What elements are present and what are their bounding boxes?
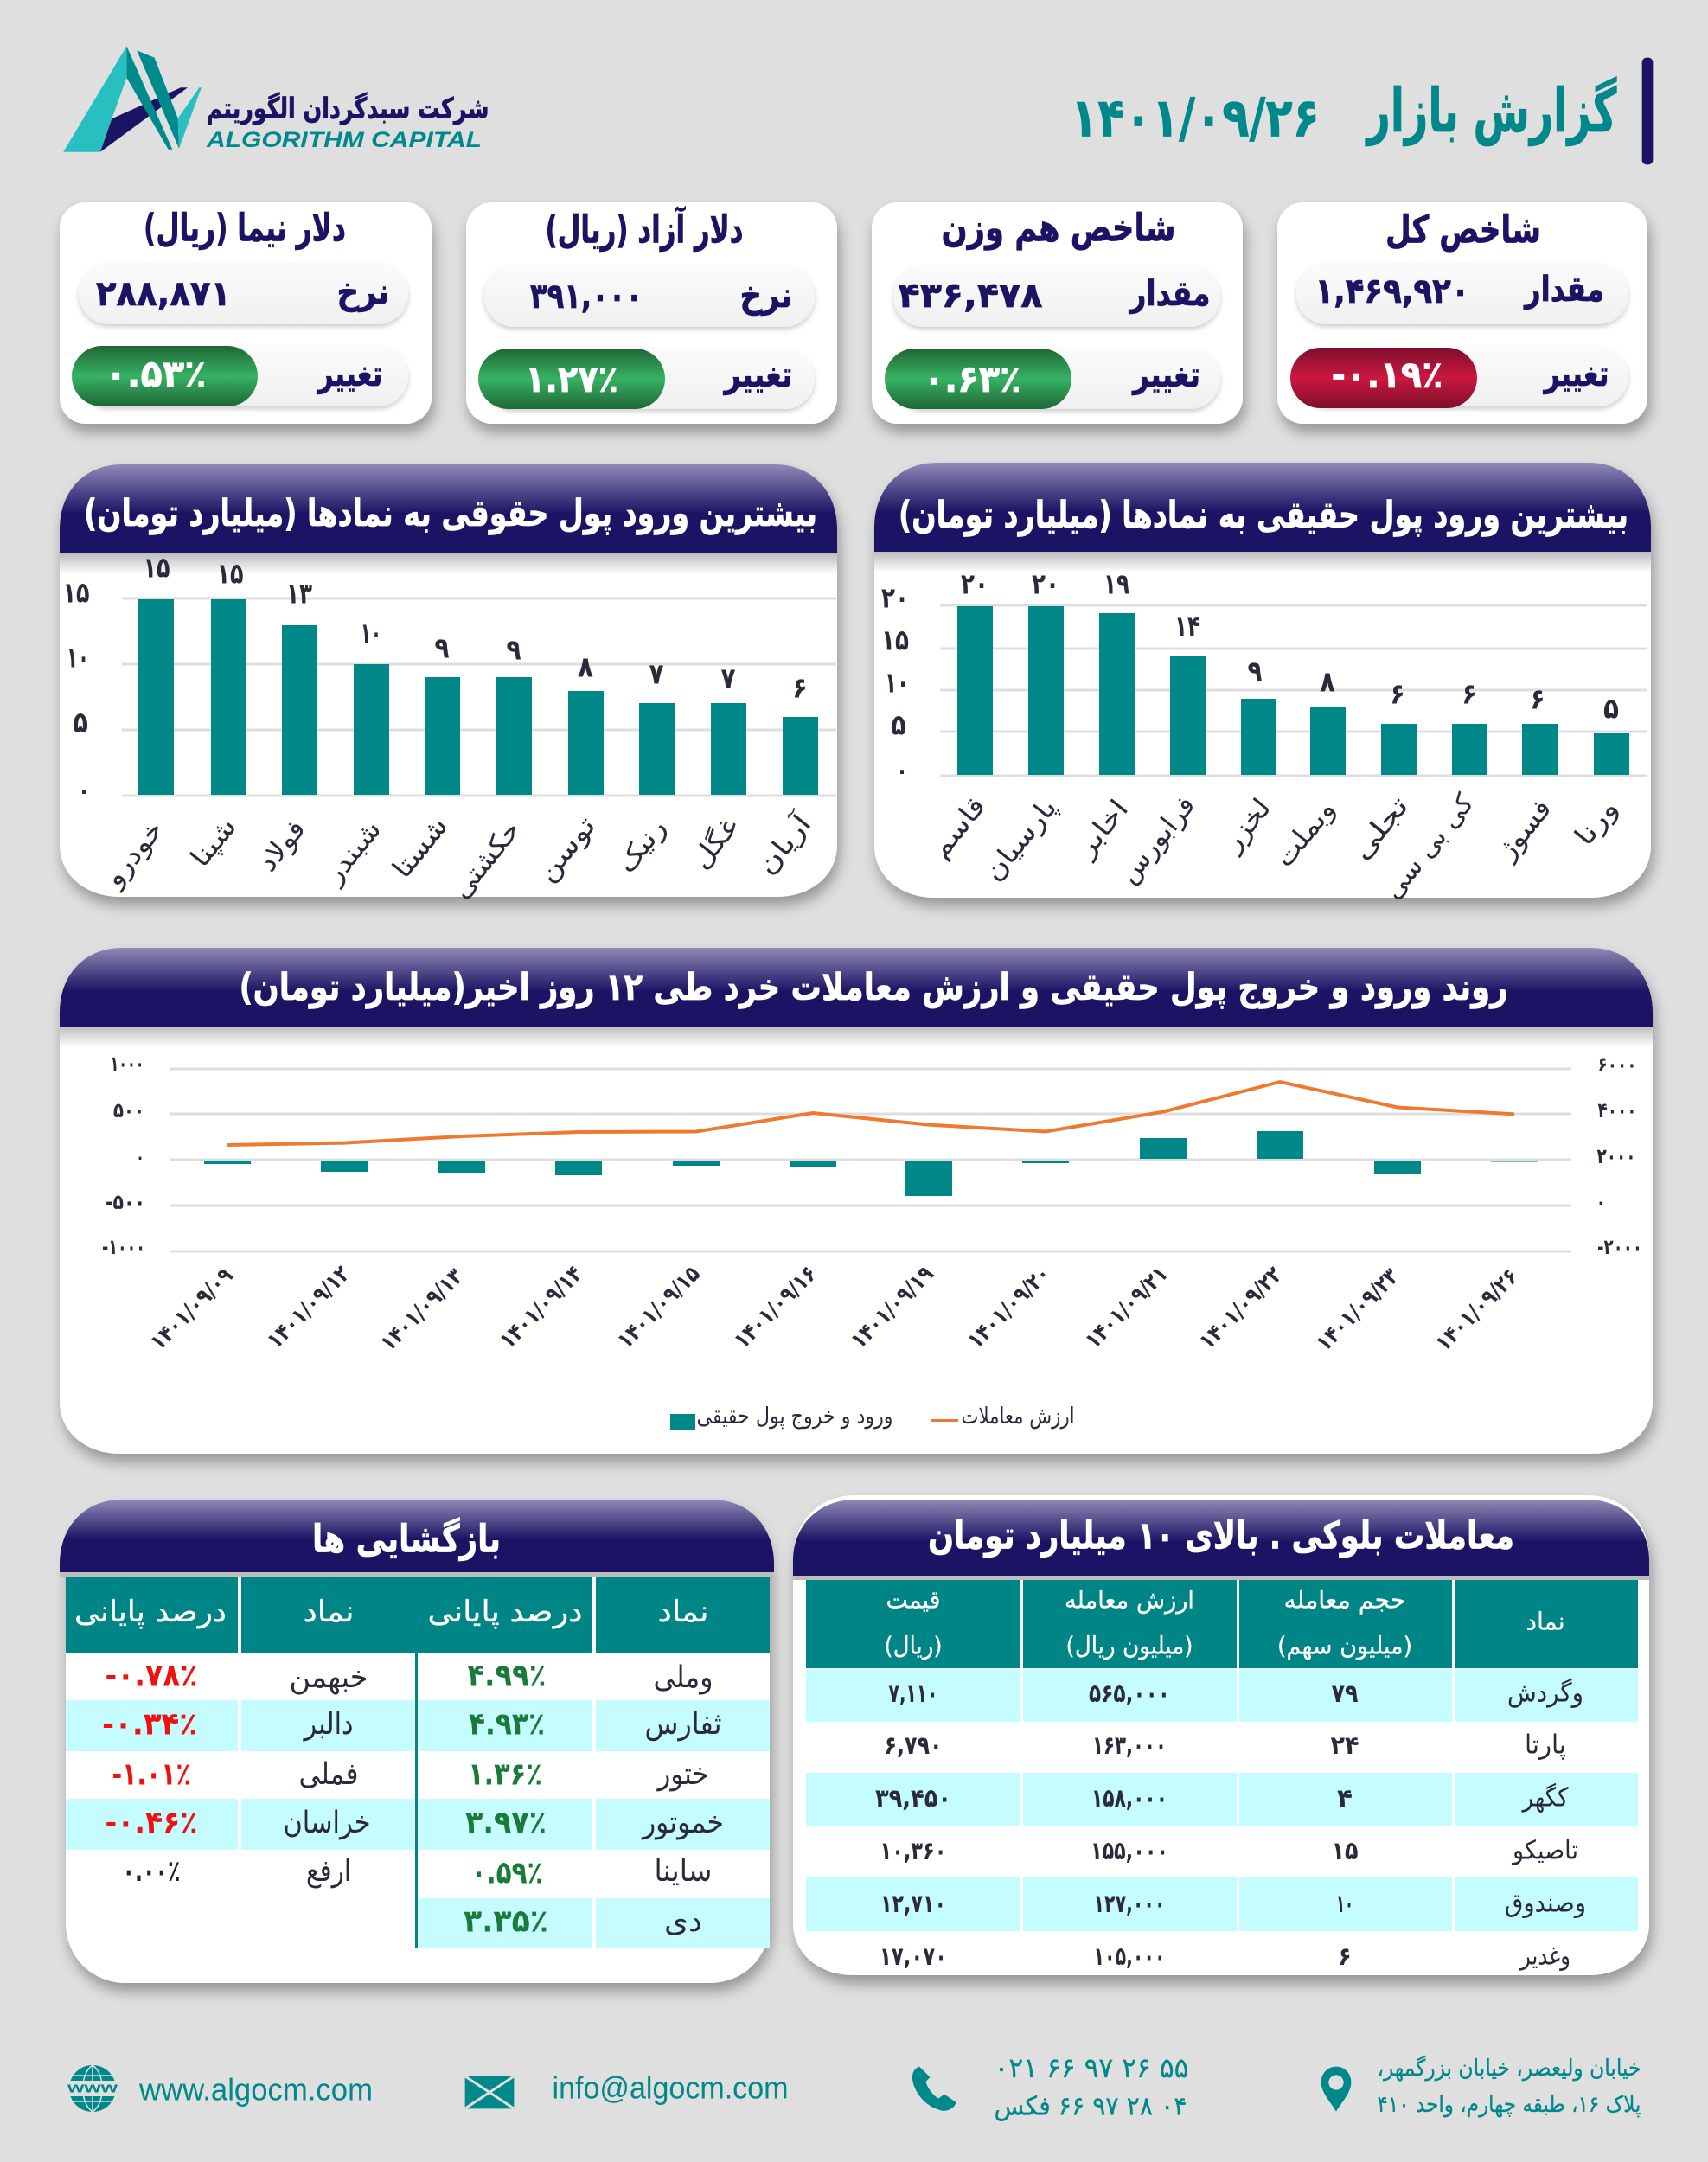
table: openings: ۱.۳۶٪ — [468, 1757, 542, 1792]
footer: address — [1321, 2055, 1641, 2118]
panel: real money inflow chart — [874, 463, 1651, 905]
combo chart: flow bars and value line: ۱۴۰۱/۰۹/۲۱ — [1080, 1261, 1174, 1354]
table: block trades: ۱۵ — [1332, 1836, 1358, 1865]
table: block trades: کگهر — [1521, 1783, 1569, 1813]
bar chart: real money: ۱۰ — [885, 666, 909, 699]
bar chart: real money: ۶ — [1391, 676, 1404, 711]
table: block trades: ۱۰,۳۶۰ — [880, 1836, 946, 1865]
table: openings: ثفارس — [645, 1707, 721, 1742]
bar chart: legal money: شبندر — [317, 814, 387, 891]
panel: block trades table — [793, 1495, 1649, 1975]
combo chart: flow bars and value line: ۰ — [1596, 1192, 1605, 1212]
bar chart: legal money: توسن — [531, 810, 602, 888]
bar chart: real money: ۸ — [1320, 664, 1335, 699]
bar chart: real money: قاسم — [924, 791, 992, 864]
panel: openings table — [60, 1500, 774, 1983]
card: total index: ۱,۴۶۹,۹۲۰ — [1315, 272, 1470, 311]
combo chart: flow bars and value line: ۲۰۰۰ — [1596, 1144, 1636, 1168]
bar chart: legal money: ۱۰ — [67, 640, 89, 675]
logo — [63, 46, 489, 152]
card: nima dollar: ۰.۵۳٪ — [106, 353, 206, 396]
bar chart: real money: ۲۰ — [961, 567, 988, 600]
table: block trades: ۱۲,۷۱۰ — [880, 1889, 946, 1918]
footer: website: www.algocm.com — [138, 2072, 373, 2107]
footer: email — [465, 2070, 789, 2108]
combo chart: flow bars and value line: ۱۴۰۱/۰۹/۱۹ — [846, 1261, 939, 1354]
combo chart: flow bars and value line: ۱۴۰۱/۰۹/۲۳ — [1311, 1263, 1404, 1357]
panel heading — [60, 1500, 774, 1572]
bar chart: legal money: ۱۳ — [286, 576, 312, 611]
panel: 12-day trend chart — [60, 948, 1653, 1454]
combo chart: flow bars and value line: ۱۴۰۱/۰۹/۲۲ — [1194, 1262, 1288, 1355]
footer: website — [66, 2065, 373, 2112]
card: total index — [1277, 202, 1647, 424]
bar chart: legal money: رنیک — [611, 812, 673, 880]
table: block trades: ۳۹,۴۵۰ — [875, 1783, 951, 1813]
footer: email: info@algocm.com — [552, 2070, 789, 2105]
bar chart: real money: ورنا — [1569, 793, 1624, 852]
combo chart: flow bars and value line: ۱۴۰۱/۰۹/۱۶ — [729, 1261, 822, 1354]
card: total index: تغییر — [1543, 355, 1609, 394]
bar chart: legal money: شپنا — [184, 811, 243, 873]
table: openings: ۴.۹۹٪ — [467, 1659, 547, 1693]
bar chart: legal money: ۹ — [434, 631, 450, 664]
card: nima dollar: تغییر — [317, 355, 382, 394]
combo chart: flow bars and value line: -۲۰۰۰ — [1597, 1235, 1642, 1259]
panel heading — [793, 1500, 1649, 1576]
icon: location pin — [1321, 2067, 1351, 2111]
table: block trades: وصندوق — [1505, 1889, 1586, 1918]
footer: address: خیابان ولیعصر، خیابان بزرگمهر، — [1377, 2055, 1641, 2082]
card: free dollar: ۱.۲۷٪ — [525, 358, 618, 401]
icon: globe: www — [67, 2079, 118, 2096]
combo chart: flow bars and value line: ۱۰۰۰ — [111, 1052, 144, 1076]
card: free dollar: دلار آزاد (ریال) — [545, 206, 744, 253]
bar chart: real money: ۱۹ — [1103, 567, 1129, 600]
bar chart: real money: فسوژ — [1490, 793, 1558, 867]
bar chart: real money: وبملت — [1269, 794, 1341, 873]
table: block trades: (میلیون ریال) — [1065, 1631, 1193, 1660]
chart legend — [670, 1404, 1074, 1430]
bar chart: legal money: حکشتی — [445, 815, 527, 905]
table: block trades: ۷,۱۱۰ — [889, 1679, 937, 1708]
table: block trades: ۶ — [1339, 1941, 1351, 1971]
table: block trades — [806, 1580, 1638, 1972]
card: free dollar: ۳۹۱,۰۰۰ — [530, 277, 643, 317]
icon: phone — [912, 2067, 956, 2110]
table: openings: خراسان — [284, 1806, 370, 1840]
card: equal weight index: ۴۳۶,۴۷۸ — [898, 276, 1043, 316]
card: equal weight index: تغییر — [1131, 355, 1200, 395]
footer: address: پلاک ۱۶، طبقه چهارم، واحد ۴۱۰ — [1377, 2092, 1641, 2118]
bar chart: legal money: ۱۵ — [216, 557, 244, 590]
bar chart: real money: پارسیان — [978, 792, 1063, 887]
combo chart: flow bars and value line: ۵۰۰ — [113, 1098, 144, 1123]
icon: envelope — [465, 2076, 514, 2108]
footer: phone: ۰۲۱ ۶۶ ۹۷ ۲۶ ۵۵ — [995, 2051, 1188, 2084]
combo chart: flow bars and value line: ۴۰۰۰ — [1598, 1098, 1636, 1123]
bar chart: real money — [881, 567, 1647, 905]
table: block trades: ۱۰ — [1336, 1889, 1353, 1918]
table: block trades: ۴ — [1337, 1783, 1353, 1813]
card: free dollar: تغییر — [723, 355, 792, 395]
bar chart: legal money: خودرو — [97, 815, 170, 894]
footer: phone: فکس‎ ۶۶ ۹۷ ۲۸ ۰۴ — [995, 2091, 1187, 2122]
table: openings: وملی — [654, 1660, 713, 1695]
table: openings: خبهمن — [289, 1660, 368, 1695]
card: equal weight index: ۰.۶۳٪ — [924, 358, 1020, 401]
bar chart: real money: ۹ — [1247, 654, 1263, 688]
table: openings: ۳.۳۵٪ — [464, 1904, 548, 1939]
table: openings: درصد پایانی — [74, 1595, 227, 1629]
card: equal weight index — [872, 202, 1243, 424]
combo chart: flow bars and value line: ۱۴۰۱/۰۹/۱۲ — [262, 1261, 355, 1354]
card: free dollar: نرخ — [740, 276, 792, 316]
panel: legal money inflow chart — [60, 464, 837, 905]
bar chart: legal money: آریان — [750, 807, 819, 881]
table: openings: -۰.۴۶٪ — [106, 1806, 197, 1840]
panel heading — [874, 463, 1651, 552]
title — [1071, 58, 1653, 164]
panel heading — [60, 464, 837, 553]
bar chart: real money: کی بی سی — [1377, 788, 1481, 905]
table: block trades: پارتا — [1525, 1730, 1566, 1761]
table: openings: -۰.۳۴٪ — [102, 1707, 197, 1742]
table: block trades: ۲۴ — [1330, 1730, 1359, 1760]
table: openings: ۰.۰۰٪ — [123, 1854, 180, 1889]
table: block trades: ۱۵۸,۰۰۰ — [1091, 1783, 1167, 1813]
table: openings: ۴.۹۳٪ — [469, 1707, 545, 1742]
bar chart: legal money: شستا — [387, 811, 454, 884]
title: ۱۴۰۱/۰۹/۲۶ — [1071, 86, 1320, 149]
combo chart: flow bars and value line: -۱۰۰۰ — [102, 1235, 145, 1259]
bar chart: real money: ۲۰ — [881, 581, 909, 614]
bar chart: real money: فرابورس — [1113, 790, 1201, 890]
combo chart: flow bars and value line: ۶۰۰۰ — [1598, 1052, 1636, 1077]
table: block trades: ۱۵۵,۰۰۰ — [1091, 1836, 1168, 1865]
table: block trades: ۶,۷۹۰ — [884, 1730, 943, 1760]
table: openings: ارفع — [306, 1854, 351, 1889]
card: total index: -۰.۱۹٪ — [1332, 354, 1443, 397]
combo chart: flow bars and value line: ۱۴۰۱/۰۹/۱۵ — [612, 1261, 706, 1354]
combo chart: flow bars and value line: ۱۴۰۱/۰۹/۲۰ — [963, 1261, 1056, 1354]
table: openings: -۱.۰۱٪ — [112, 1757, 190, 1792]
panel heading — [60, 948, 1653, 1027]
bar chart: legal money: غگل — [685, 811, 745, 875]
table: block trades: وغدیر — [1519, 1941, 1570, 1972]
logo: شرکت سبدگردان الگوریتم — [206, 92, 489, 126]
bar chart: legal money: ۵ — [73, 706, 88, 739]
panel heading: روند ورود و خروج پول حقیقی و ارزش معاملات خرد طی ۱۲ روز اخیر(میلیارد تومان) — [239, 966, 1507, 1009]
logo: ALGORITHM CAPITAL — [206, 128, 482, 152]
combo chart: flow bars and value line: ۱۴۰۱/۰۹/۱۳ — [375, 1263, 469, 1357]
bar chart: real money: ۲۰ — [1032, 567, 1059, 600]
bar chart: legal money: ۱۵ — [62, 576, 90, 609]
table: openings: ۳.۹۷٪ — [465, 1806, 547, 1840]
bar chart: real money: ۱۵ — [881, 623, 909, 657]
bar chart: real money: لخزر — [1216, 793, 1277, 859]
table: block trades: (ریال) — [884, 1631, 943, 1660]
table: openings: -۰.۷۸٪ — [106, 1659, 197, 1693]
table: openings: ساینا — [654, 1854, 713, 1889]
combo chart: flow bars and value line: ۰ — [136, 1147, 144, 1167]
card: nima dollar: دلار نیما (ریال) — [144, 206, 346, 251]
table: block trades: ۵۶۵,۰۰۰ — [1089, 1679, 1170, 1708]
table: block trades: ۱۲۷,۰۰۰ — [1093, 1889, 1166, 1918]
table: block trades: (میلیون سهم) — [1277, 1631, 1412, 1660]
chart legend: ارزش معاملات — [962, 1404, 1074, 1430]
card: total index: مقدار — [1523, 270, 1604, 310]
bar chart: real money: ۶ — [1531, 681, 1545, 716]
panel heading: بیشترین ورود پول حقوقی به نمادها (میلیارد تومان) — [84, 492, 817, 535]
table: block trades: ۱۰۵,۰۰۰ — [1093, 1941, 1166, 1971]
table: openings: دالبر — [303, 1707, 353, 1742]
bar chart: legal money: ۶ — [792, 671, 808, 704]
bar chart: legal money: ۷ — [721, 661, 735, 695]
table: openings: نماد — [303, 1595, 355, 1629]
table: openings: خموتور — [641, 1806, 724, 1840]
card: total index: شاخص کل — [1385, 208, 1541, 253]
bar chart: real money: ۱۴ — [1174, 609, 1200, 643]
bar chart: real money: ۵ — [1603, 692, 1619, 725]
combo chart: flow bars and value line: ۱۴۰۱/۰۹/۰۹ — [145, 1263, 239, 1356]
table: block trades: ۱۷,۰۷۰ — [880, 1941, 947, 1971]
table: block trades: ۱۶۳,۰۰۰ — [1092, 1730, 1167, 1760]
chart legend: ورود و خروج پول حقیقی — [697, 1404, 892, 1430]
table: block trades: ۷۹ — [1332, 1679, 1359, 1708]
bar chart: legal money: فولاد — [252, 814, 312, 878]
panel heading: معاملات بلوکی . بالای ۱۰ میلیارد تومان — [928, 1513, 1514, 1558]
bar chart: real money: اخابر — [1069, 794, 1135, 865]
bar chart: legal money: ۸ — [578, 650, 593, 683]
footer: phone — [912, 2051, 1188, 2122]
bar chart: real money: تجلی — [1346, 790, 1415, 867]
table: openings — [66, 1577, 770, 1948]
bar chart: legal money: ۱۰ — [361, 616, 381, 650]
table: block trades: ارزش معامله — [1065, 1586, 1194, 1614]
table: block trades: نماد — [1526, 1607, 1565, 1636]
bar chart: legal money: ۰ — [78, 777, 90, 804]
bar chart: legal money: ۱۵ — [144, 550, 170, 585]
combo chart: flow bars and value line: -۵۰۰ — [106, 1190, 145, 1214]
bar chart: legal money: ۹ — [507, 633, 521, 666]
icon: globe — [66, 2065, 119, 2112]
bar chart: real money: ۵ — [891, 707, 906, 742]
table: openings: دی — [664, 1904, 702, 1939]
bar chart: legal money: ۷ — [649, 657, 664, 690]
combo chart: flow bars and value line — [102, 1052, 1642, 1357]
bar chart: legal money — [62, 550, 836, 905]
bar chart: real money: ۰ — [896, 756, 908, 785]
table: openings: فملی — [299, 1757, 358, 1792]
card: equal weight index: مقدار — [1129, 274, 1211, 314]
card: equal weight index: شاخص هم وزن — [941, 206, 1176, 251]
table: openings: درصد پایانی — [427, 1595, 583, 1629]
card: nima dollar: ۲۸۸,۸۷۱ — [96, 274, 231, 314]
table: openings: ۰.۵۹٪ — [470, 1856, 543, 1890]
table: openings: ختور — [656, 1757, 709, 1792]
table: block trades: وگردش — [1507, 1678, 1583, 1709]
card: nima dollar — [60, 202, 432, 424]
panel heading: بازگشایی ها — [312, 1517, 501, 1562]
bar chart: real money: ۶ — [1462, 676, 1477, 711]
table: block trades: تاصیکو — [1511, 1835, 1578, 1866]
table: openings: نماد — [657, 1595, 709, 1629]
table: block trades: قیمت — [886, 1586, 941, 1614]
combo chart: flow bars and value line: ۱۴۰۱/۰۹/۲۶ — [1430, 1263, 1524, 1357]
table: block trades: حجم معامله — [1283, 1586, 1406, 1614]
combo chart: flow bars and value line: ۱۴۰۱/۰۹/۱۴ — [495, 1261, 588, 1354]
card: free dollar — [466, 202, 837, 424]
card: nima dollar: نرخ — [337, 272, 389, 312]
